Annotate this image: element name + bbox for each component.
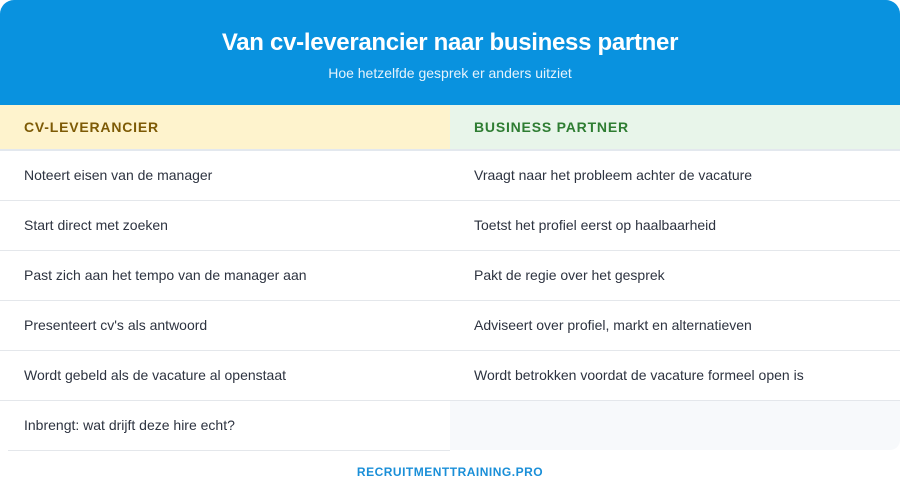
table rows: Toetst het profiel eerst op haalbaarheid [474,217,716,233]
table rows: Pakt de regie over het gesprek [474,267,665,283]
title: Van cv-leverancier naar business partner [222,29,678,56]
header [0,0,900,105]
table rows: Wordt gebeld als de vacature al openstaat [24,367,286,383]
table rows: Inbrengt: wat drijft deze hire echt? [24,417,235,433]
table rows: Vraagt naar het probleem achter de vacature [474,167,752,183]
table rows [0,167,900,451]
table rows: Noteert eisen van de manager [24,167,212,183]
column header: business partner: BUSINESS PARTNER [474,119,629,135]
table rows: Adviseert over profiel, markt en alternatieven [474,317,752,333]
column header: business partner [450,105,900,151]
subtitle: Hoe hetzelfde gesprek er anders uitziet [328,65,572,81]
table rows: Wordt betrokken voordat de vacature formeel open is [474,367,804,383]
column header: cv-leverancier [0,105,450,151]
column header: cv-leverancier: CV-LEVERANCIER [24,119,159,135]
table rows: Presenteert cv's als antwoord [24,317,207,333]
table rows: Past zich aan het tempo van de manager aan [24,267,307,283]
footer: RECRUITMENTTRAINING.PRO [357,465,543,479]
table rows: Start direct met zoeken [24,217,168,233]
